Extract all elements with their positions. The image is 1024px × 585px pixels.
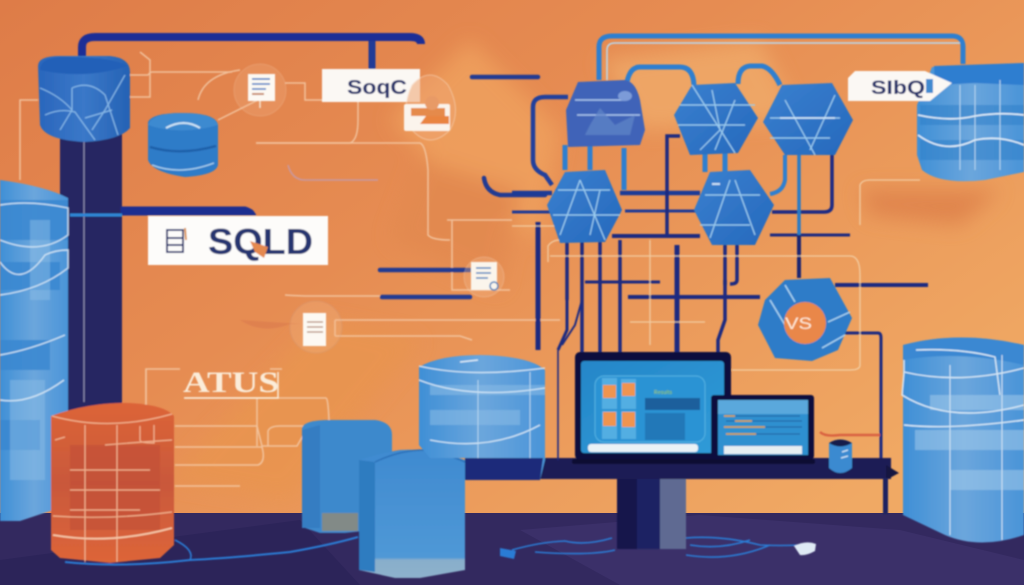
- hexagon node 4: [547, 170, 622, 243]
- blue cylinder center right: [419, 355, 545, 480]
- icon: book: [167, 228, 186, 252]
- blue cylinder center back: [302, 420, 392, 533]
- navy pipe top left: [82, 37, 421, 56]
- label: SoqC: SoqC: [347, 77, 407, 99]
- main laptop screen: [581, 361, 724, 453]
- cable connectors: [500, 542, 816, 559]
- blue pipes right: [565, 36, 963, 194]
- navy grid lines right: [512, 97, 928, 460]
- blue highlight line: [70, 214, 122, 216]
- blue cylinder center front: [359, 450, 465, 578]
- document icon top: [234, 64, 286, 116]
- short navy dashes: [380, 77, 545, 297]
- shelf: [465, 458, 899, 549]
- blue cylinder top right: [917, 63, 1024, 181]
- blue connection cables on floor: [65, 537, 800, 565]
- red cylinder: [51, 403, 174, 563]
- blue cylinder top left: [38, 56, 130, 142]
- label: ATUS outline text: ATUS: [183, 366, 279, 399]
- main laptop screen: Results: [654, 390, 672, 396]
- document icon lower: [240, 301, 342, 353]
- pipe drop to label: [368, 41, 376, 70]
- floor: [0, 513, 1024, 585]
- background shapes: [170, 40, 1000, 500]
- light translucent panel lines: [512, 180, 920, 370]
- label: SQLD: SQLD: [208, 221, 313, 262]
- hexagon node 2: [674, 83, 758, 155]
- blue small cylinder: [148, 113, 218, 177]
- tower column: [60, 130, 122, 515]
- red cable: [820, 432, 880, 436]
- small blue cylinder: [829, 440, 852, 473]
- hexagon node with VS: [758, 278, 852, 361]
- laptop base: [572, 459, 815, 464]
- orange card icon: [404, 75, 456, 140]
- hexagon node 3: [763, 83, 853, 155]
- label: SIbQ: [848, 71, 952, 101]
- main laptop: [575, 352, 731, 460]
- blue cylinder right big: [902, 338, 1024, 542]
- small laptop: [711, 395, 814, 459]
- hexagon node 1: [566, 80, 645, 147]
- small laptop screen: [718, 400, 808, 455]
- document icon middle: [464, 257, 504, 297]
- hexagon node 5: [694, 170, 774, 245]
- label: SoqC: [322, 69, 420, 102]
- label: SQLD: [148, 216, 328, 265]
- thin connector lines left: [20, 52, 560, 486]
- VS badge: VS: [785, 314, 812, 333]
- navy arm: [122, 208, 254, 214]
- blue cylinder left big: [0, 180, 68, 521]
- label: SIbQ: SIbQ: [871, 78, 925, 99]
